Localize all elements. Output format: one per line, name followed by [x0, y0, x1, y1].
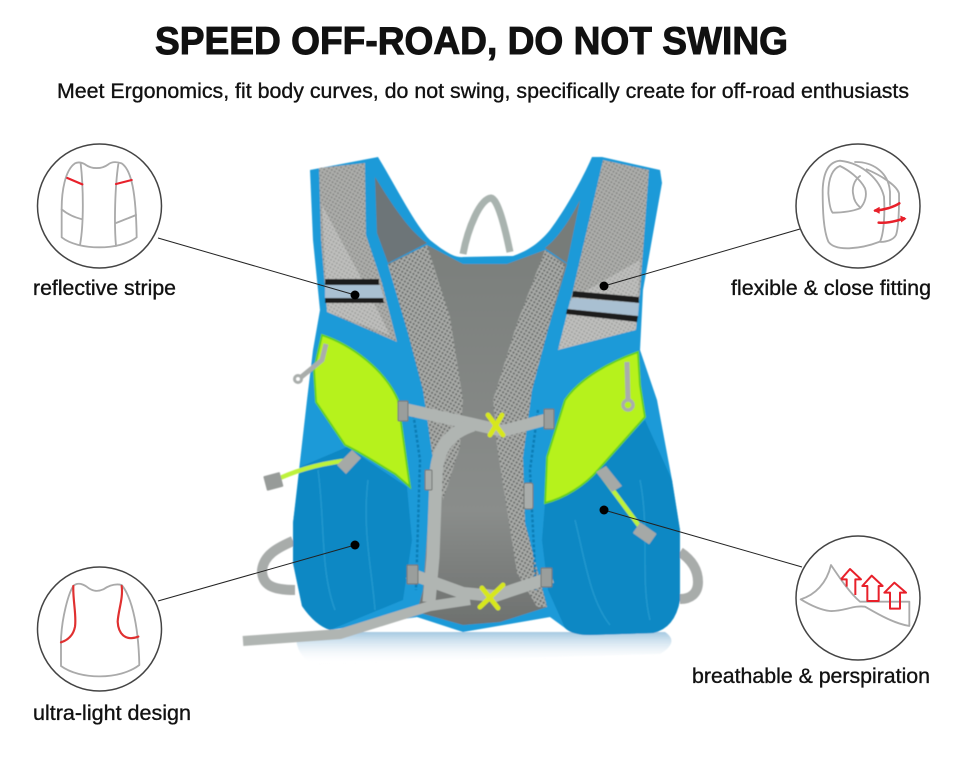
subtitle: Meet Ergonomics, fit body curves, do not swing, specifically create for off-road enthusiasts [57, 79, 909, 103]
right lime pocket [545, 352, 645, 503]
pocket zipper seams [412, 405, 538, 590]
icon: ultra-light vest [38, 567, 162, 691]
icon: flexible fitting vest [796, 144, 920, 268]
label: reflective stripe: reflective stripe [33, 276, 176, 300]
right zipper pull [623, 362, 633, 410]
dark upper back panels [375, 177, 427, 263]
right shoulder mesh [558, 160, 649, 350]
left zipper pull [294, 344, 326, 382]
right back mesh [493, 250, 565, 607]
left lime pocket [314, 335, 410, 487]
right lower mesh pocket [542, 420, 680, 635]
pocket fold lines [318, 470, 650, 625]
icon: breathable fabric with arrows [796, 536, 920, 660]
right drawstring and toggle [596, 466, 657, 544]
top carry handle [463, 198, 510, 254]
leader line: ultra-light design [158, 540, 360, 601]
label: flexible and close fitting: flexible & close fitting [731, 276, 931, 300]
lime X stitching [480, 415, 503, 608]
leader line: breathable and perspiration [600, 506, 802, 567]
right reflective stripe [566, 291, 639, 322]
icon: reflective stripe vest [38, 144, 162, 268]
left shoulder mesh [319, 163, 397, 342]
backpack vest illustration [243, 157, 698, 664]
left shoulder highlight [322, 205, 390, 335]
right shoulder highlight [558, 260, 640, 350]
blue vest body [293, 157, 680, 635]
left reflective stripe [325, 279, 384, 303]
leader line: flexible and close fitting [600, 229, 800, 290]
centre back panel [388, 245, 567, 625]
floor reflection [297, 632, 671, 664]
leader line: reflective stripe [158, 238, 360, 300]
front chest and waist straps [243, 408, 552, 641]
strap buckles [398, 401, 554, 587]
left back mesh [388, 245, 463, 500]
label: breathable and perspiration: breathable & perspiration [692, 664, 930, 688]
label: ultra-light design: ultra-light design [33, 701, 191, 725]
title: SPEED OFF-ROAD, DO NOT SWING [155, 20, 788, 63]
left lower mesh pocket [293, 447, 412, 630]
back waist strap loops [262, 541, 698, 599]
left drawstring and toggle [263, 450, 361, 491]
